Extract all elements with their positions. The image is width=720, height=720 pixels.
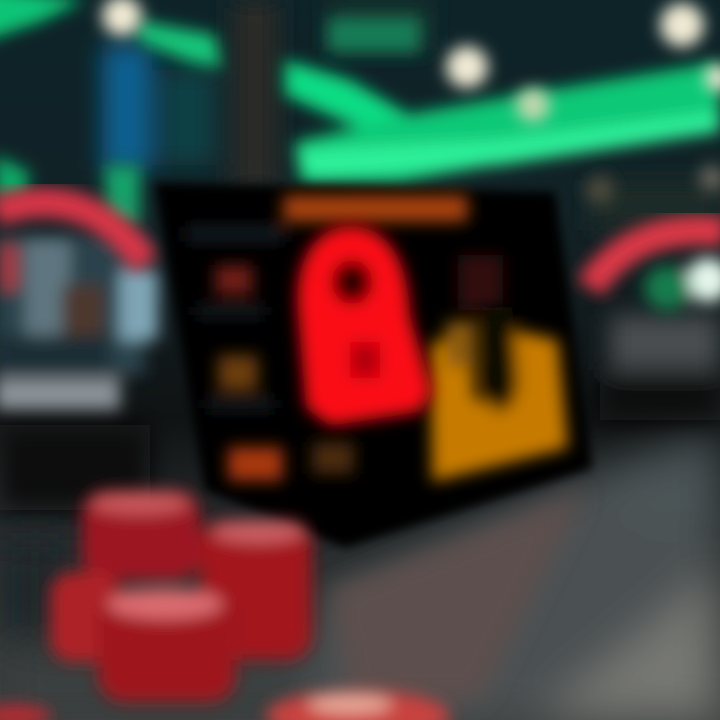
icon: red padlock <box>297 226 432 426</box>
tablet menu icons <box>195 255 503 481</box>
floor <box>0 430 720 720</box>
icon: orange padlock <box>430 305 568 482</box>
white bulbs <box>102 0 720 204</box>
tablet frame <box>155 183 592 548</box>
poker chips stack <box>50 490 312 702</box>
left machine <box>0 235 158 410</box>
background panels <box>0 0 720 510</box>
floor texture <box>330 490 585 700</box>
left red arch <box>0 203 146 264</box>
right red arch <box>590 230 720 288</box>
bottom chips <box>0 690 450 720</box>
green neon lights <box>0 0 720 225</box>
right glow <box>644 258 720 310</box>
tablet header bar <box>185 195 468 242</box>
